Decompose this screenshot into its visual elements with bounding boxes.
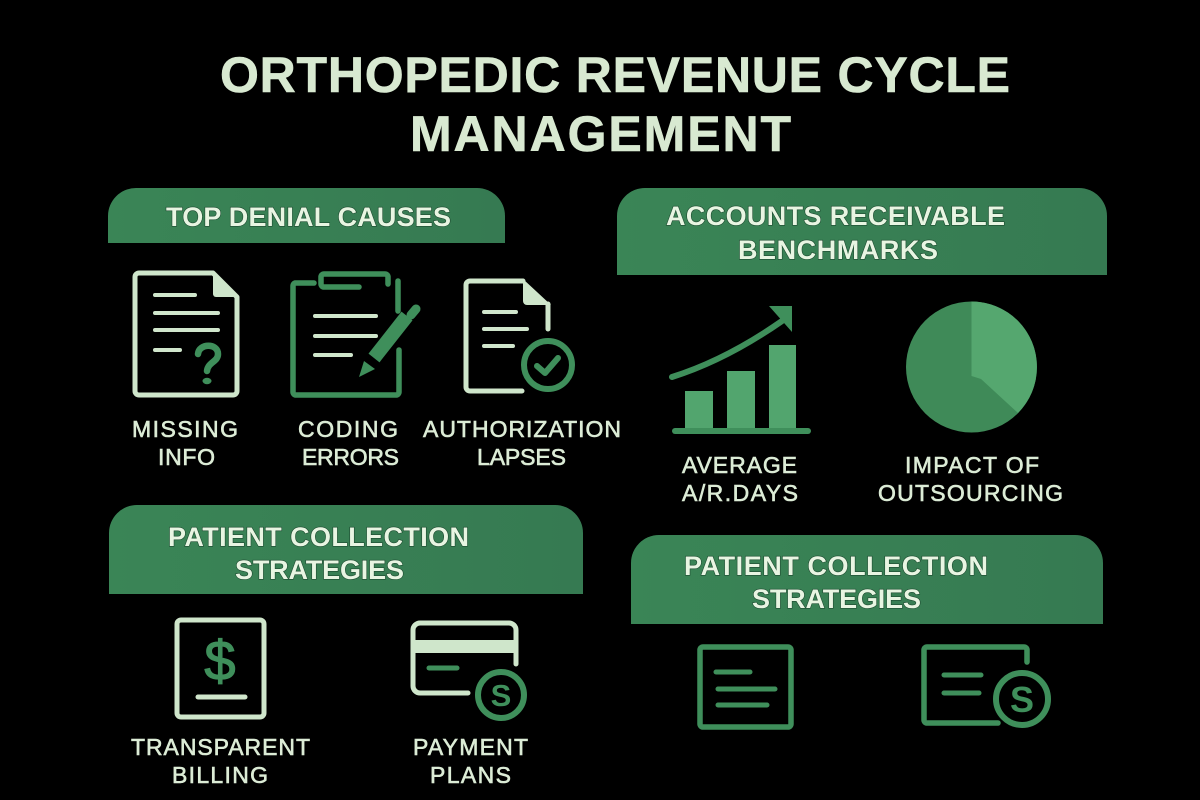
heading: top denial causes: TOP DENIAL CAUSES (166, 202, 451, 232)
panel: accounts receivable benchmarks (617, 188, 1107, 506)
icon: transparent billing: $ (204, 629, 236, 692)
label: transparent billing: BILLING (172, 762, 268, 788)
heading: patient collection strategies right: PATIENT COLLECTION (684, 551, 988, 581)
panel: patient collection strategies right (631, 535, 1103, 727)
heading: patient collection strategies left: PATIENT COLLECTION (168, 522, 469, 552)
label: authorization lapses: AUTHORIZATION (423, 416, 621, 442)
heading: patient collection strategies right (631, 535, 1103, 624)
label: coding errors: CODING (298, 416, 398, 442)
label: authorization lapses (423, 416, 621, 470)
label: missing info: MISSING (132, 416, 238, 442)
heading: top denial causes (108, 188, 505, 243)
heading: patient collection strategies left (109, 505, 583, 594)
title: ORTHOPEDIC REVENUE CYCLE (220, 47, 1010, 103)
label: coding errors (298, 416, 399, 470)
label: average a/r days: A/R.DAYS (682, 480, 798, 506)
panel: top denial causes (108, 188, 621, 470)
icon: document with check badge (466, 279, 572, 391)
title: MANAGEMENT (410, 106, 791, 162)
icon: payment plans card (412, 623, 524, 718)
heading: patient collection strategies left: STRATEGIES (235, 555, 404, 585)
label: coding errors: ERRORS (302, 444, 399, 470)
label: average a/r days: AVERAGE (682, 452, 797, 478)
label: payment plans: PAYMENT (413, 734, 528, 760)
label: authorization lapses: LAPSES (477, 444, 566, 470)
heading: patient collection strategies right: STRATEGIES (752, 584, 921, 614)
heading: accounts receivable benchmarks: ACCOUNTS RECEIVABLE (666, 201, 1005, 231)
heading: accounts receivable benchmarks (617, 188, 1107, 275)
title (220, 47, 1010, 162)
pie chart: impact of outsourcing (906, 302, 1037, 432)
label: average a/r days (682, 452, 798, 506)
label: missing info: INFO (158, 444, 215, 470)
label: transparent billing: TRANSPARENT (131, 734, 310, 760)
icon: transparent billing (177, 620, 264, 717)
label: impact of outsourcing: OUTSOURCING (878, 480, 1063, 506)
icon: document with question mark (135, 272, 239, 395)
label: payment plans: PLANS (430, 762, 511, 788)
panel: patient collection strategies left (109, 505, 583, 788)
icon: payment plans card: S (491, 678, 511, 713)
label: impact of outsourcing (878, 452, 1063, 506)
heading: accounts receivable benchmarks: BENCHMARKS (738, 235, 938, 265)
label: impact of outsourcing: IMPACT OF (905, 452, 1039, 478)
label: transparent billing (131, 734, 310, 788)
icon: statement with dollar badge: S (1010, 679, 1034, 720)
icon: statement with dollar badge (924, 647, 1048, 725)
icon: statement box (700, 647, 791, 727)
icon: clipboard with pencil (293, 274, 416, 395)
bar chart with rising arrow (672, 306, 811, 434)
label: missing info (132, 416, 238, 470)
label: payment plans (413, 734, 528, 788)
